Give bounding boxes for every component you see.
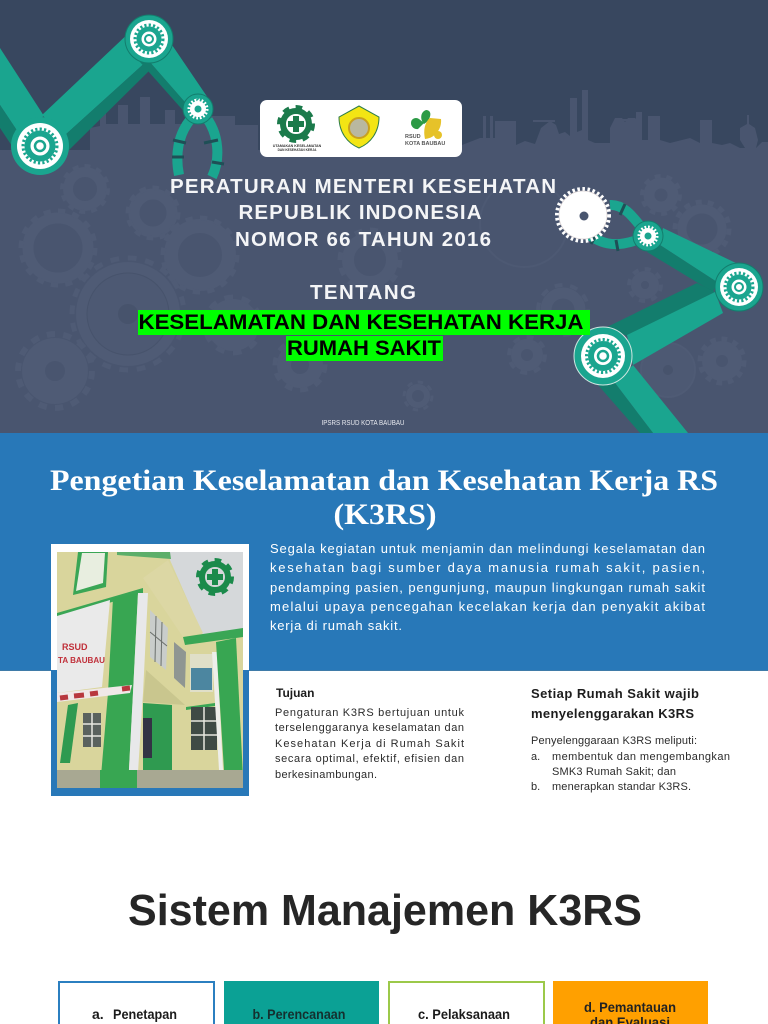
joint: small gear	[183, 94, 213, 124]
photo sign text: RSUD	[62, 642, 88, 652]
hospital photo with frame	[51, 544, 249, 796]
heading: Pengetian Keselamatan dan Kesehatan Kerja RS	[50, 464, 718, 497]
joint: large gear left	[11, 117, 69, 175]
box a	[59, 982, 214, 1024]
icon: K3 gear cross: DAN KESEHATAN KERJA	[278, 148, 317, 152]
photo sign text 2: TA BAUBAU	[58, 656, 105, 665]
definition paragraph: pendamping pasien, pengunjung, maupun lingkungan rumah sakit	[270, 580, 705, 595]
text block: tujuan: Kesehatan Kerja di Rumah Sakit	[275, 738, 464, 750]
heading: (K3RS)	[334, 498, 436, 531]
claw: right arm gripper	[583, 204, 642, 251]
panel: blue definition band	[0, 433, 768, 671]
box c	[389, 982, 544, 1024]
claw: left arm gripper	[172, 120, 224, 177]
title block: PERATURAN MENTERI KESEHATAN	[170, 175, 556, 198]
icon: city shield	[339, 106, 379, 148]
joint: right lower gear	[574, 327, 632, 385]
gripped white gear	[558, 190, 608, 240]
text block: setiap rumah sakit: Setiap Rumah Sakit wajib	[531, 686, 699, 701]
skyline silhouette	[0, 90, 768, 170]
text block: tujuan: Pengaturan K3RS bertujuan untuk	[275, 707, 464, 719]
icon: K3 gear cross	[273, 107, 322, 152]
logo card	[260, 100, 462, 157]
text block: setiap rumah sakit: a.	[531, 751, 540, 763]
highlighted subtitle: KESELAMATAN DAN KESEHATAN KERJA	[138, 311, 584, 334]
icon: RSUD logo: RSUD	[405, 134, 421, 140]
text block: setiap rumah sakit	[531, 686, 730, 793]
text block: tujuan: berkesinambungan.	[275, 769, 377, 781]
title block: TENTANG	[310, 281, 416, 304]
text block: setiap rumah sakit: menyelenggarakan K3RS	[531, 706, 694, 721]
definition paragraph: Segala kegiatan untuk menjamin dan melindungi keselamatan dan	[270, 541, 705, 556]
joint: top gear	[125, 15, 173, 63]
box a: a.	[92, 1006, 104, 1022]
section heading: Sistem Manajemen K3RS	[128, 886, 642, 935]
icon: RSUD logo	[405, 110, 445, 147]
background gears	[18, 166, 744, 410]
text block: setiap rumah sakit: membentuk dan mengembangkan	[552, 751, 730, 763]
robot arm: top left	[0, 15, 224, 177]
icon: photo K3 gear	[198, 560, 232, 594]
text block: setiap rumah sakit: SMK3 Rumah Sakit; dan	[552, 766, 676, 778]
robot arm: right	[558, 190, 763, 433]
box b: b. Perencanaan	[252, 1006, 346, 1022]
icon: RSUD logo: KOTA BAUBAU	[405, 141, 445, 147]
text block: tujuan	[275, 686, 464, 781]
title block: REPUBLIK INDONESIA	[238, 201, 482, 224]
definition paragraph: kesehatan bagi sumber daya manusia rumah sakit, pasien,	[270, 560, 705, 575]
joint: right small gear	[633, 221, 663, 251]
box d	[553, 981, 708, 1024]
box a: Penetapan	[113, 1006, 177, 1022]
text block: setiap rumah sakit: menerapkan standar K3RS.	[552, 781, 691, 793]
title block: NOMOR 66 TAHUN 2016	[235, 228, 491, 251]
icon: K3 gear cross: UTAMAKAN KESELAMATAN	[273, 144, 322, 148]
text block: tujuan: terselenggaranya keselamatan dan	[275, 722, 464, 734]
definition paragraph: kerja di rumah sakit.	[270, 618, 402, 633]
box d: d. Pemantauan	[584, 999, 676, 1015]
box b	[224, 981, 379, 1024]
text block: tujuan: secara optimal, efektif, efisien dan	[275, 753, 464, 765]
highlighted subtitle: RUMAH SAKIT	[287, 337, 441, 360]
definition paragraph	[270, 541, 705, 633]
box c: c. Pelaksanaan	[418, 1006, 510, 1022]
heading	[50, 464, 718, 531]
definition paragraph: melalui upaya pencegahan kecelakan kerja dan penyakit akibat	[270, 599, 705, 614]
highlighted subtitle	[138, 310, 590, 361]
text block: setiap rumah sakit: Penyelenggaraan K3RS meliputi:	[531, 735, 697, 747]
title block	[170, 175, 556, 304]
panel: dark header background	[0, 0, 768, 434]
joint: right outer gear	[715, 263, 763, 311]
text block: setiap rumah sakit: b.	[531, 781, 540, 793]
text block: tujuan: Tujuan	[276, 686, 314, 700]
credit text: IPSRS RSUD KOTA BAUBAU	[322, 420, 404, 427]
